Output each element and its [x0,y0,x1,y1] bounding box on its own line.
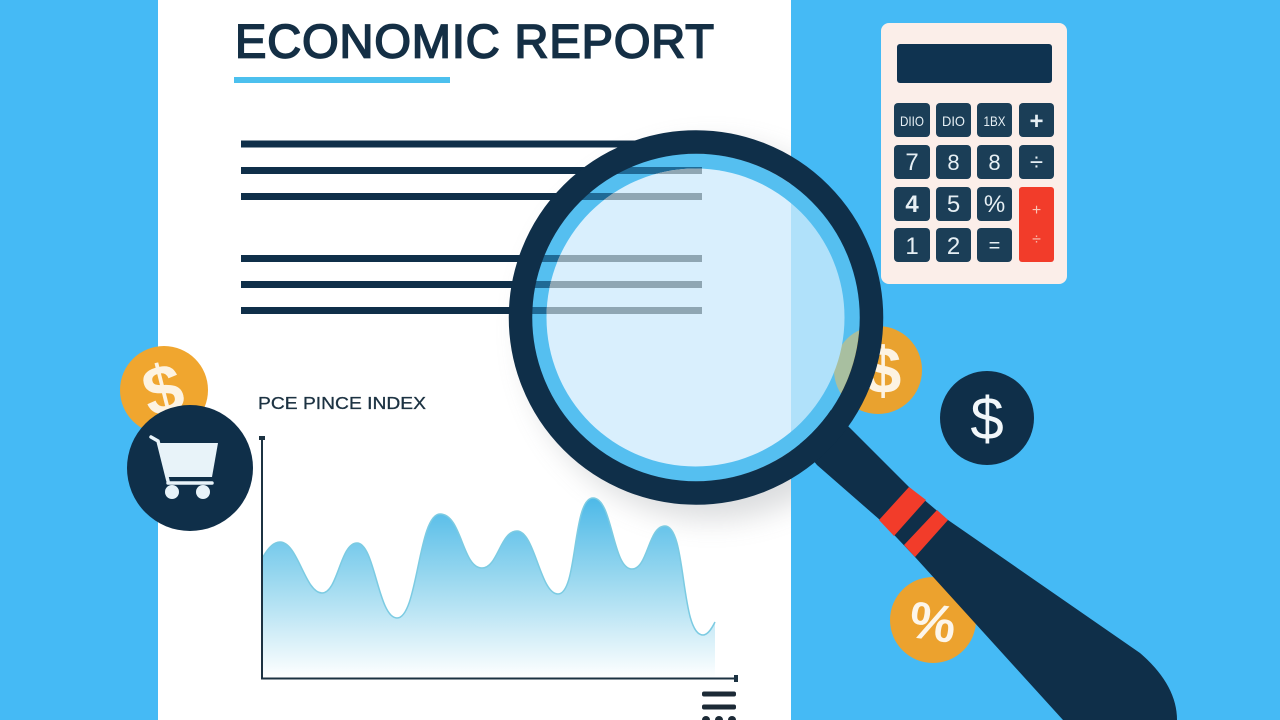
icon: calculator: DIIO [900,113,924,129]
icon: right dollar coin: $ [865,333,901,407]
icon: calculator: 8 [988,150,1001,175]
icon: left dollar coin [120,346,208,434]
icon: percent coin [890,577,976,663]
icon: calculator: 4 [905,191,919,218]
icon: calculator: % [984,191,1005,218]
title: ECONOMIC REPORT [235,14,714,68]
icon: calculator: ÷ [1030,149,1043,176]
icon: calculator: ÷ [1032,231,1041,248]
area chart [259,436,738,682]
lens [532,154,860,482]
icon: shopping cart badge [127,405,253,531]
panel: report page [158,0,791,720]
icon: calculator: 1BX [984,113,1006,129]
icon: calculator [881,23,1067,284]
title underline [234,77,450,83]
icon: calculator: DIO [942,113,965,129]
chart heading: PCE PINCE INDEX [258,393,426,413]
icon: calculator: + [1029,108,1044,135]
magnifying glass [508,130,1177,720]
icon: calculator: 8 [947,150,960,175]
page-end marks [702,692,736,720]
handle red bands [879,487,948,557]
icon: calculator: 2 [947,233,960,260]
icon: right dollar coin [834,326,922,414]
icon: dollar badge: $ [970,385,1004,452]
text lines [241,140,702,314]
icon: dollar badge [940,371,1034,465]
icon: left dollar coin: $ [135,347,191,433]
icon: calculator: 1 [905,233,919,260]
icon: percent coin: % [906,591,960,655]
lens shadow [523,138,791,530]
icon: calculator: = [989,235,1000,257]
icon: calculator: 7 [905,149,919,176]
icon: calculator: 5 [947,191,960,218]
lens rim [520,142,872,493]
handle [780,400,1177,720]
icon: calculator: + [1032,202,1041,219]
